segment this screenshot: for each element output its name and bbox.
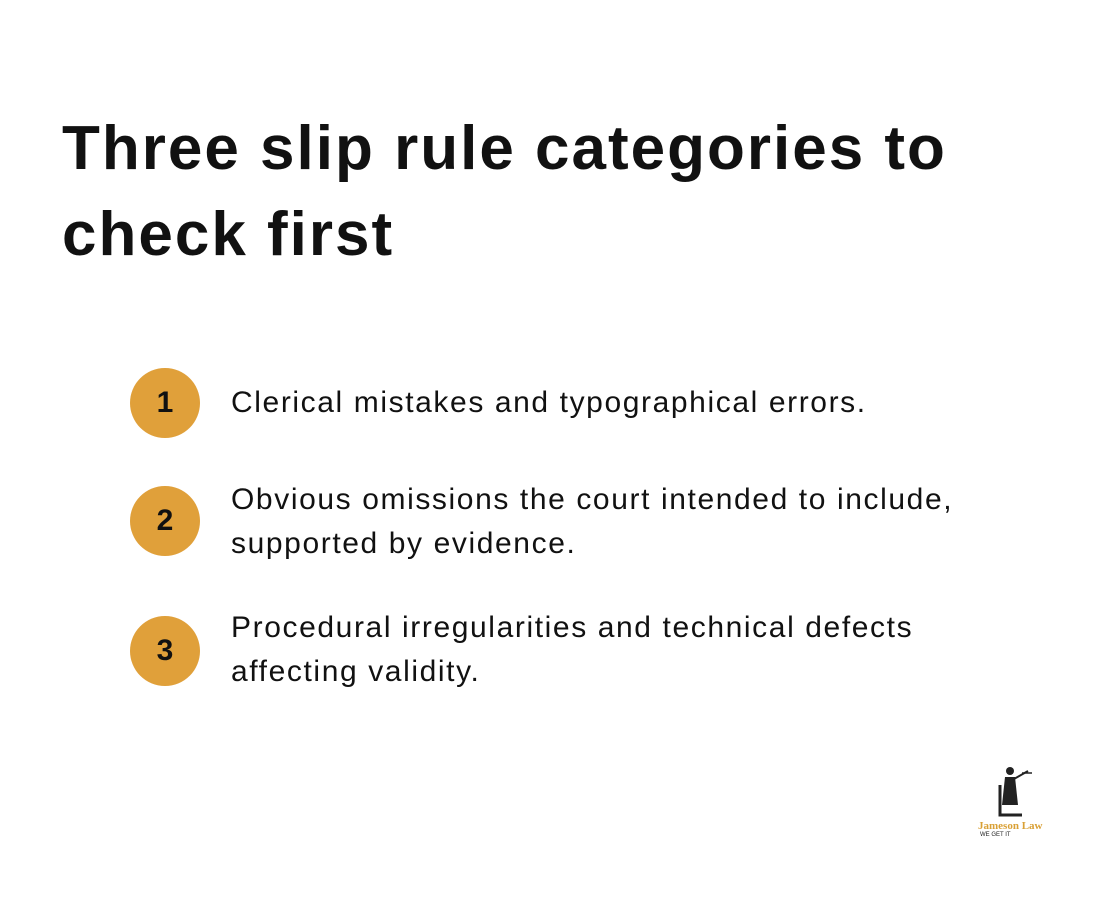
logo: WE GET IT bbox=[980, 832, 1011, 838]
text 1: Clerical mistakes and typographical errors. bbox=[231, 386, 867, 419]
circle 2 bbox=[130, 486, 200, 556]
text 2 bbox=[231, 483, 953, 560]
logo text: Jameson Law bbox=[978, 820, 1042, 832]
icon: lady justice bbox=[998, 767, 1032, 816]
circle 3 bbox=[130, 616, 200, 686]
item 3 bbox=[130, 611, 913, 688]
circle 3: 3 bbox=[157, 634, 173, 667]
circle 1: 1 bbox=[157, 386, 173, 419]
text 3 bbox=[231, 611, 913, 688]
text 3: Procedural irregularities and technical defects bbox=[231, 611, 913, 644]
item 2 bbox=[130, 483, 953, 560]
logo bbox=[978, 767, 1042, 838]
title: check first bbox=[62, 200, 394, 269]
title bbox=[62, 114, 947, 269]
title: Three slip rule categories to bbox=[62, 114, 947, 183]
text 3: affecting validity. bbox=[231, 655, 480, 688]
item 1 bbox=[130, 368, 867, 438]
circle 2: 2 bbox=[157, 504, 173, 537]
text 2: supported by evidence. bbox=[231, 527, 576, 560]
circle 1 bbox=[130, 368, 200, 438]
text 2: Obvious omissions the court intended to include, bbox=[231, 483, 953, 516]
